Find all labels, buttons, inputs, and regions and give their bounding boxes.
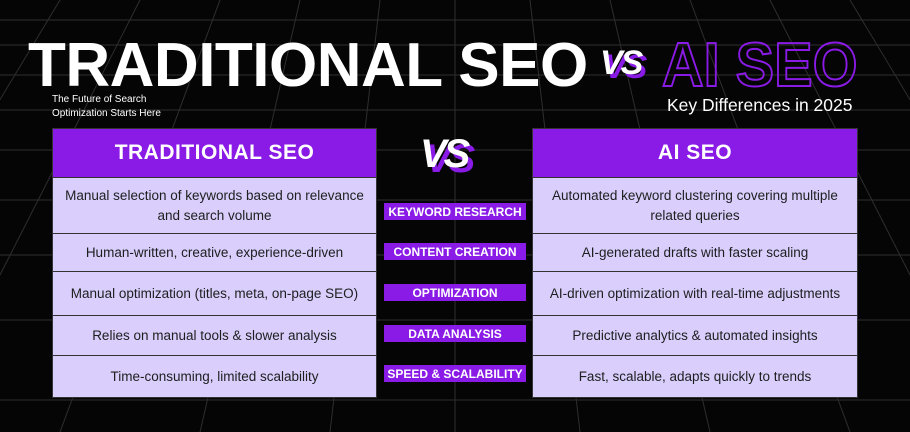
label: speed & scalability: SPEED & SCALABILITY	[387, 366, 523, 380]
panel: ai seo: AI-generated drafts with faster scaling	[582, 244, 808, 260]
label: keyword research: KEYWORD RESEARCH	[388, 204, 522, 218]
title: vs: VS	[600, 44, 641, 82]
label: data analysis	[384, 325, 526, 342]
subtitle	[52, 94, 161, 119]
panel: traditional seo: Manual optimization (titles, meta, on-page SEO)	[71, 286, 358, 300]
key differences: Key Differences in 2025	[667, 95, 852, 115]
panel: traditional seo: Time-consuming, limited scalability	[110, 368, 319, 384]
panel: traditional seo: Human-written, creative, experience-driven	[86, 244, 343, 260]
header: ai seo	[532, 128, 858, 178]
header: traditional seo	[52, 128, 377, 178]
panel: ai seo: Predictive analytics & automated insights	[572, 328, 818, 342]
title	[28, 31, 856, 100]
label: optimization	[384, 284, 526, 301]
subtitle: Optimization Starts Here	[52, 108, 161, 119]
subtitle: The Future of Search	[52, 94, 146, 105]
label: content creation: CONTENT CREATION	[393, 244, 517, 258]
label: data analysis: DATA ANALYSIS	[408, 326, 502, 340]
panel: ai seo	[532, 128, 858, 398]
panel: traditional seo: Manual selection of keywords based on relevance and search volume	[65, 188, 364, 222]
icon: vs: VS	[420, 132, 467, 176]
panel: ai seo: Fast, scalable, adapts quickly to trends	[579, 368, 811, 384]
panel: traditional seo: Relies on manual tools & slower analysis	[92, 328, 337, 342]
header: ai seo: AI SEO	[658, 141, 732, 164]
panel: traditional seo	[52, 128, 377, 398]
title: traditional seo: TRADITIONAL SEO	[28, 31, 588, 100]
panel: ai seo: Automated keyword clustering covering multiple related queries	[552, 188, 838, 222]
label: optimization: OPTIMIZATION	[412, 286, 498, 300]
header: traditional seo: TRADITIONAL SEO	[115, 141, 314, 164]
panel: ai seo: AI-driven optimization with real-time adjustments	[550, 286, 840, 300]
